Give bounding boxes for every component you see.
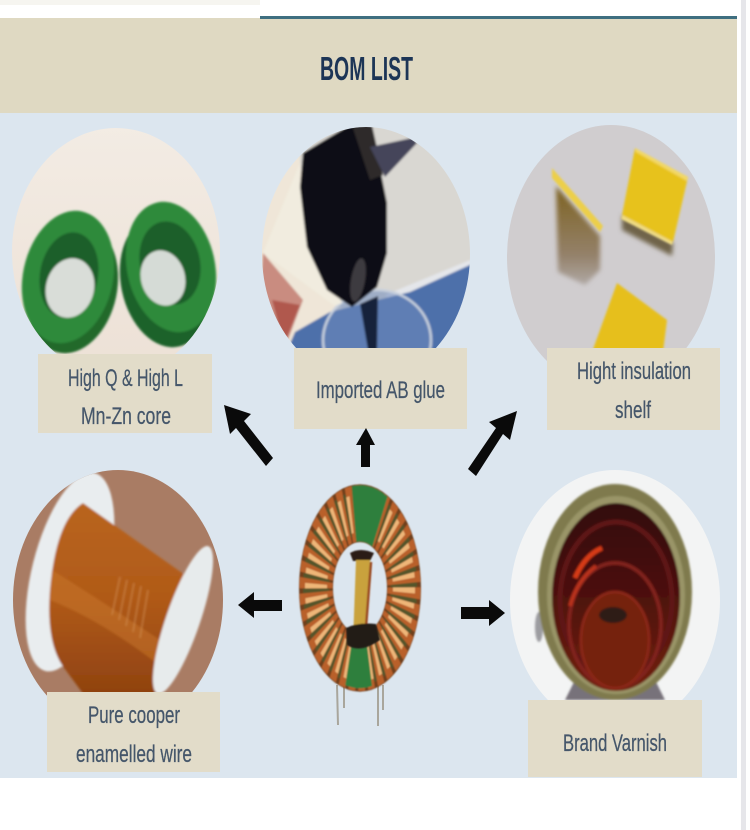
central toroid inductor: [316, 513, 404, 726]
label text: [577, 358, 691, 424]
photo: pouring black glue: [262, 127, 470, 348]
photo: green ferrite rings: [12, 128, 220, 354]
photo: varnish can: [510, 470, 720, 730]
label text: Hight insulation: [577, 358, 691, 385]
panel: enamelled wire: [13, 470, 223, 772]
arrow: to glue: [356, 428, 375, 467]
right edge strip: [741, 0, 746, 830]
header band: [0, 16, 737, 113]
panel: brand varnish: [510, 470, 720, 777]
label text: Pure cooper: [88, 702, 180, 729]
label text: Brand Varnish: [563, 730, 667, 757]
label text: High Q & High L: [68, 365, 183, 392]
label box: [47, 692, 220, 772]
label text: [76, 702, 192, 768]
label text: enamelled wire: [76, 741, 192, 768]
icon: central yellow stick: [346, 550, 380, 649]
label box: [547, 348, 720, 430]
panel: Mn-Zn core: [12, 128, 220, 433]
panel: AB glue: [255, 120, 480, 429]
icon: lead wires: [337, 685, 383, 726]
top faint strip: [0, 0, 260, 5]
arrow: to core: [224, 405, 273, 466]
photo: copper wire spool: [13, 470, 223, 696]
photo: yellow insulation pieces: [507, 125, 715, 361]
label text: [68, 365, 183, 430]
background panel: [0, 113, 737, 778]
label box: [528, 700, 702, 777]
label box: [38, 354, 212, 433]
label text: Mn-Zn core: [81, 403, 171, 430]
label box: [294, 348, 467, 429]
icon: coil windings: [316, 513, 404, 663]
arrow: to wire: [238, 592, 282, 618]
arrow: to varnish: [461, 600, 505, 626]
label text: shelf: [615, 397, 651, 424]
panel: insulation shelf: [500, 120, 725, 430]
title: BOM LIST: [320, 50, 413, 87]
label text: Imported AB glue: [316, 377, 445, 404]
arrow: to shelf: [468, 411, 517, 476]
